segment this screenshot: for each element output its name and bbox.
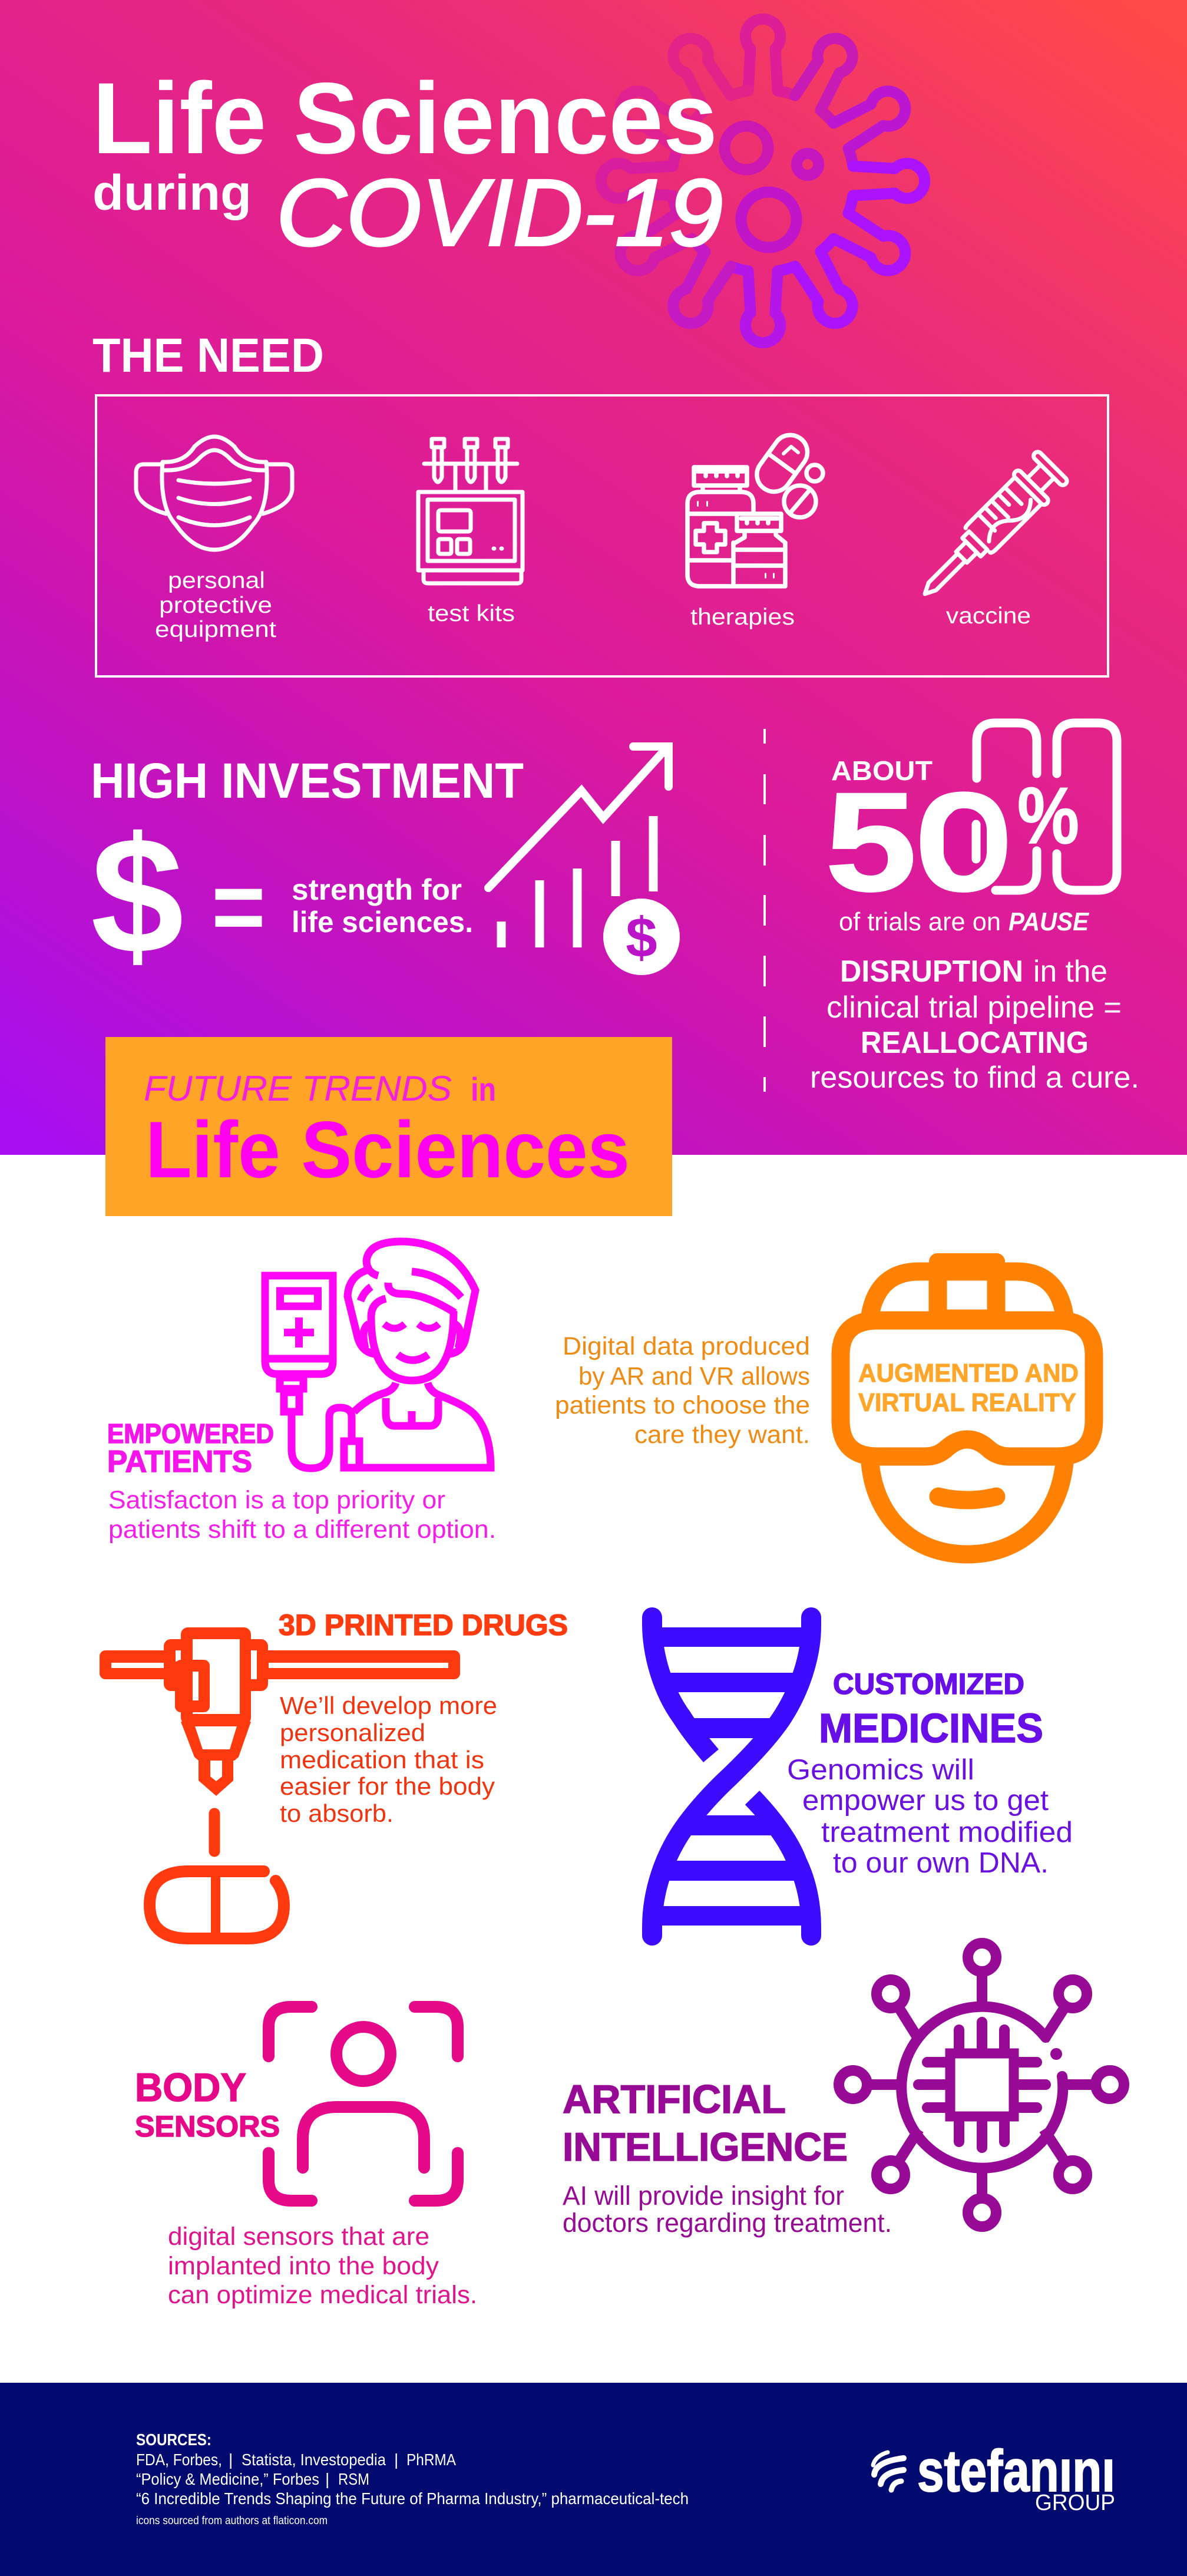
panel: customized medicines	[642, 1607, 1073, 1946]
text: AR VR description: by AR and VR allows	[578, 1362, 810, 1391]
text: disruption: in the	[1033, 955, 1107, 989]
label: personal protective equipment: personal	[168, 568, 265, 593]
heading: empowered patients	[107, 1418, 274, 1479]
panel: about 50 percent	[810, 723, 1139, 1095]
text: AR VR description	[555, 1332, 810, 1449]
text: patient satisfaction: patients shift to a different option.	[108, 1515, 496, 1544]
text: disruption: REALLOCATING	[861, 1026, 1089, 1060]
heading: body sensors: SENSORS	[135, 2110, 280, 2143]
text: patient satisfaction	[108, 1486, 496, 1544]
background: gradient header	[0, 0, 1187, 1155]
label: vaccine: vaccine	[946, 603, 1031, 629]
icon: virus	[601, 19, 925, 343]
text: 3D printing description: to absorb.	[280, 1799, 394, 1827]
label: personal protective equipment: equipment	[155, 617, 276, 642]
text: AR VR description: Digital data produced	[563, 1332, 810, 1360]
title: during	[92, 165, 252, 220]
heading: empowered patients: EMPOWERED	[107, 1418, 274, 1449]
text: sources	[136, 2430, 689, 2527]
icon: VR headset	[841, 1253, 1094, 1554]
text: disruption: DISRUPTION	[840, 955, 1023, 989]
text: sources: PhRMA	[406, 2450, 456, 2469]
text: sources: icons sourced from authors at flaticon.com	[136, 2515, 328, 2527]
text: of trials are on pause	[839, 907, 1090, 936]
text: sources: “6 Incredible Trends Shaping the Future of Pharma Industry,” pharmaceutical-tech	[136, 2489, 689, 2508]
panel: 3D printed drugs	[100, 1609, 568, 1938]
text: 3D printing description: medication that is	[280, 1746, 484, 1774]
icon: body scan	[269, 2007, 458, 2201]
decorative outline behind 50 percent	[977, 723, 1117, 890]
icon: DNA helix	[642, 1607, 821, 1946]
text: sensors description: digital sensors that are	[168, 2222, 429, 2251]
chart: rising arrow with bars	[488, 747, 669, 947]
label: personal protective equipment: protective	[159, 593, 272, 618]
text: sources: “Policy & Medicine,” Forbes	[136, 2470, 319, 2488]
icon: test kit	[418, 439, 523, 583]
heading: empowered patients: PATIENTS	[107, 1445, 252, 1479]
number: percent sign: %	[1017, 771, 1079, 860]
heading: high investment: HIGH INVESTMENT	[91, 753, 524, 808]
text: future trends in: FUTURE TRENDS	[144, 1069, 452, 1108]
heading: customized medicines: CUSTOMIZED	[833, 1667, 1024, 1700]
heading: customized medicines	[819, 1667, 1043, 1751]
heading: AR and VR: AUGMENTED AND	[858, 1359, 1079, 1388]
text: 3D printing description: personalized	[280, 1719, 425, 1746]
text: 3D printing description: easier for the body	[280, 1772, 495, 1800]
heading: the need: THE NEED	[92, 329, 324, 382]
dollar sign: $	[91, 802, 184, 988]
icon: mask	[136, 437, 292, 550]
text: disruption	[810, 955, 1139, 1095]
logo mark	[873, 2452, 904, 2490]
panel: empowered patients	[107, 1241, 496, 1544]
icon: dollar coin: $	[626, 906, 657, 969]
text: sources: |	[394, 2450, 398, 2469]
icon: patient with IV	[265, 1241, 491, 1468]
label: personal protective equipment	[155, 568, 276, 642]
text: disruption: resources to find a cure.	[810, 1061, 1139, 1095]
text: sensors description: can optimize medical trials.	[168, 2281, 477, 2309]
text: sources: FDA, Forbes,	[136, 2450, 222, 2469]
text: sensors description	[168, 2222, 477, 2309]
label: test kits: test kits	[428, 601, 515, 626]
number: 50: 5	[825, 764, 917, 920]
heading: artificial intelligence: INTELLIGENCE	[563, 2125, 848, 2169]
heading: AR and VR	[858, 1359, 1079, 1417]
text: strength for life sciences: strength for	[292, 873, 462, 906]
text: AR VR description: patients to choose the	[555, 1391, 810, 1419]
text: of trials are on pause: of trials are on	[839, 907, 1001, 936]
wordmark: stefanını	[917, 2438, 1115, 2504]
text: about: ABOUT	[831, 755, 933, 786]
text: strength for life sciences: life sciences.	[292, 906, 473, 939]
heading: AR and VR: VIRTUAL REALITY	[858, 1388, 1076, 1417]
icon: dollar coin	[603, 899, 680, 975]
icon: AI chip network	[839, 1943, 1124, 2227]
text: sources: RSM	[338, 2470, 369, 2488]
panel: high investment	[91, 747, 680, 988]
text: genomics description	[787, 1754, 1073, 1879]
heading: customized medicines: MEDICINES	[819, 1705, 1043, 1751]
text: sources: Statista, Investopedia	[242, 2450, 386, 2469]
title: COVID-19	[276, 160, 723, 265]
text: sources: |	[325, 2470, 329, 2488]
panel: artificial intelligence	[563, 1943, 1124, 2238]
text: genomics description: Genomics will	[787, 1754, 974, 1786]
divider: dashed line	[763, 729, 766, 1092]
heading: artificial intelligence: ARTIFICIAL	[563, 2077, 786, 2122]
equals sign: =	[211, 851, 266, 963]
counter of zero with inner pill	[944, 808, 987, 873]
label: therapies: therapies	[690, 605, 795, 630]
text: future trends in: in	[471, 1071, 496, 1108]
heading: artificial intelligence	[563, 2077, 848, 2169]
text: sources: SOURCES:	[136, 2430, 211, 2449]
icon: therapies	[687, 428, 823, 586]
text: sensors description: implanted into the body	[168, 2252, 439, 2280]
logo: stefanini group	[873, 2438, 1115, 2515]
text: 3D printing description	[280, 1692, 497, 1827]
heading: body sensors	[135, 2065, 280, 2143]
text: AI description: AI will provide insight for	[563, 2181, 844, 2211]
text: sources: |	[229, 2450, 233, 2469]
number: 50: 0	[914, 764, 1013, 920]
text: strength for life sciences	[292, 873, 473, 939]
text: 3D printing description: We’ll develop more	[280, 1692, 497, 1719]
text: AI description: doctors regarding treatment.	[563, 2208, 892, 2238]
text: genomics description: treatment modified	[821, 1817, 1073, 1848]
text: genomics description: empower us to get	[802, 1785, 1049, 1817]
logo: stefanini group: GROUP	[1035, 2491, 1115, 2515]
footer band	[0, 2383, 1187, 2576]
text: of trials are on pause: PAUSE	[1009, 907, 1090, 936]
title: Life Sciences	[92, 62, 718, 175]
heading: body sensors: BODY	[135, 2065, 246, 2110]
text: AI description	[563, 2181, 892, 2238]
heading: 3D printed drugs: 3D PRINTED DRUGS	[279, 1609, 568, 1642]
panel: future trends banner	[105, 1037, 672, 1216]
text: genomics description: to our own DNA.	[833, 1847, 1049, 1879]
panel: body sensors	[135, 2007, 477, 2309]
panel: augmented and virtual reality	[555, 1253, 1094, 1554]
text: patient satisfaction: Satisfacton is a top priority or	[108, 1486, 445, 1514]
panel: the need	[96, 395, 1108, 676]
background: white content area	[0, 1155, 1187, 2383]
text: disruption: clinical trial pipeline =	[826, 990, 1122, 1025]
icon: 3D printer nozzle	[100, 1627, 460, 1938]
number: 50	[825, 764, 1013, 920]
text: AR VR description: care they want.	[634, 1421, 810, 1449]
title	[92, 62, 723, 265]
icon: vaccine	[909, 450, 1069, 610]
heading: life sciences: Life Sciences	[146, 1105, 630, 1194]
